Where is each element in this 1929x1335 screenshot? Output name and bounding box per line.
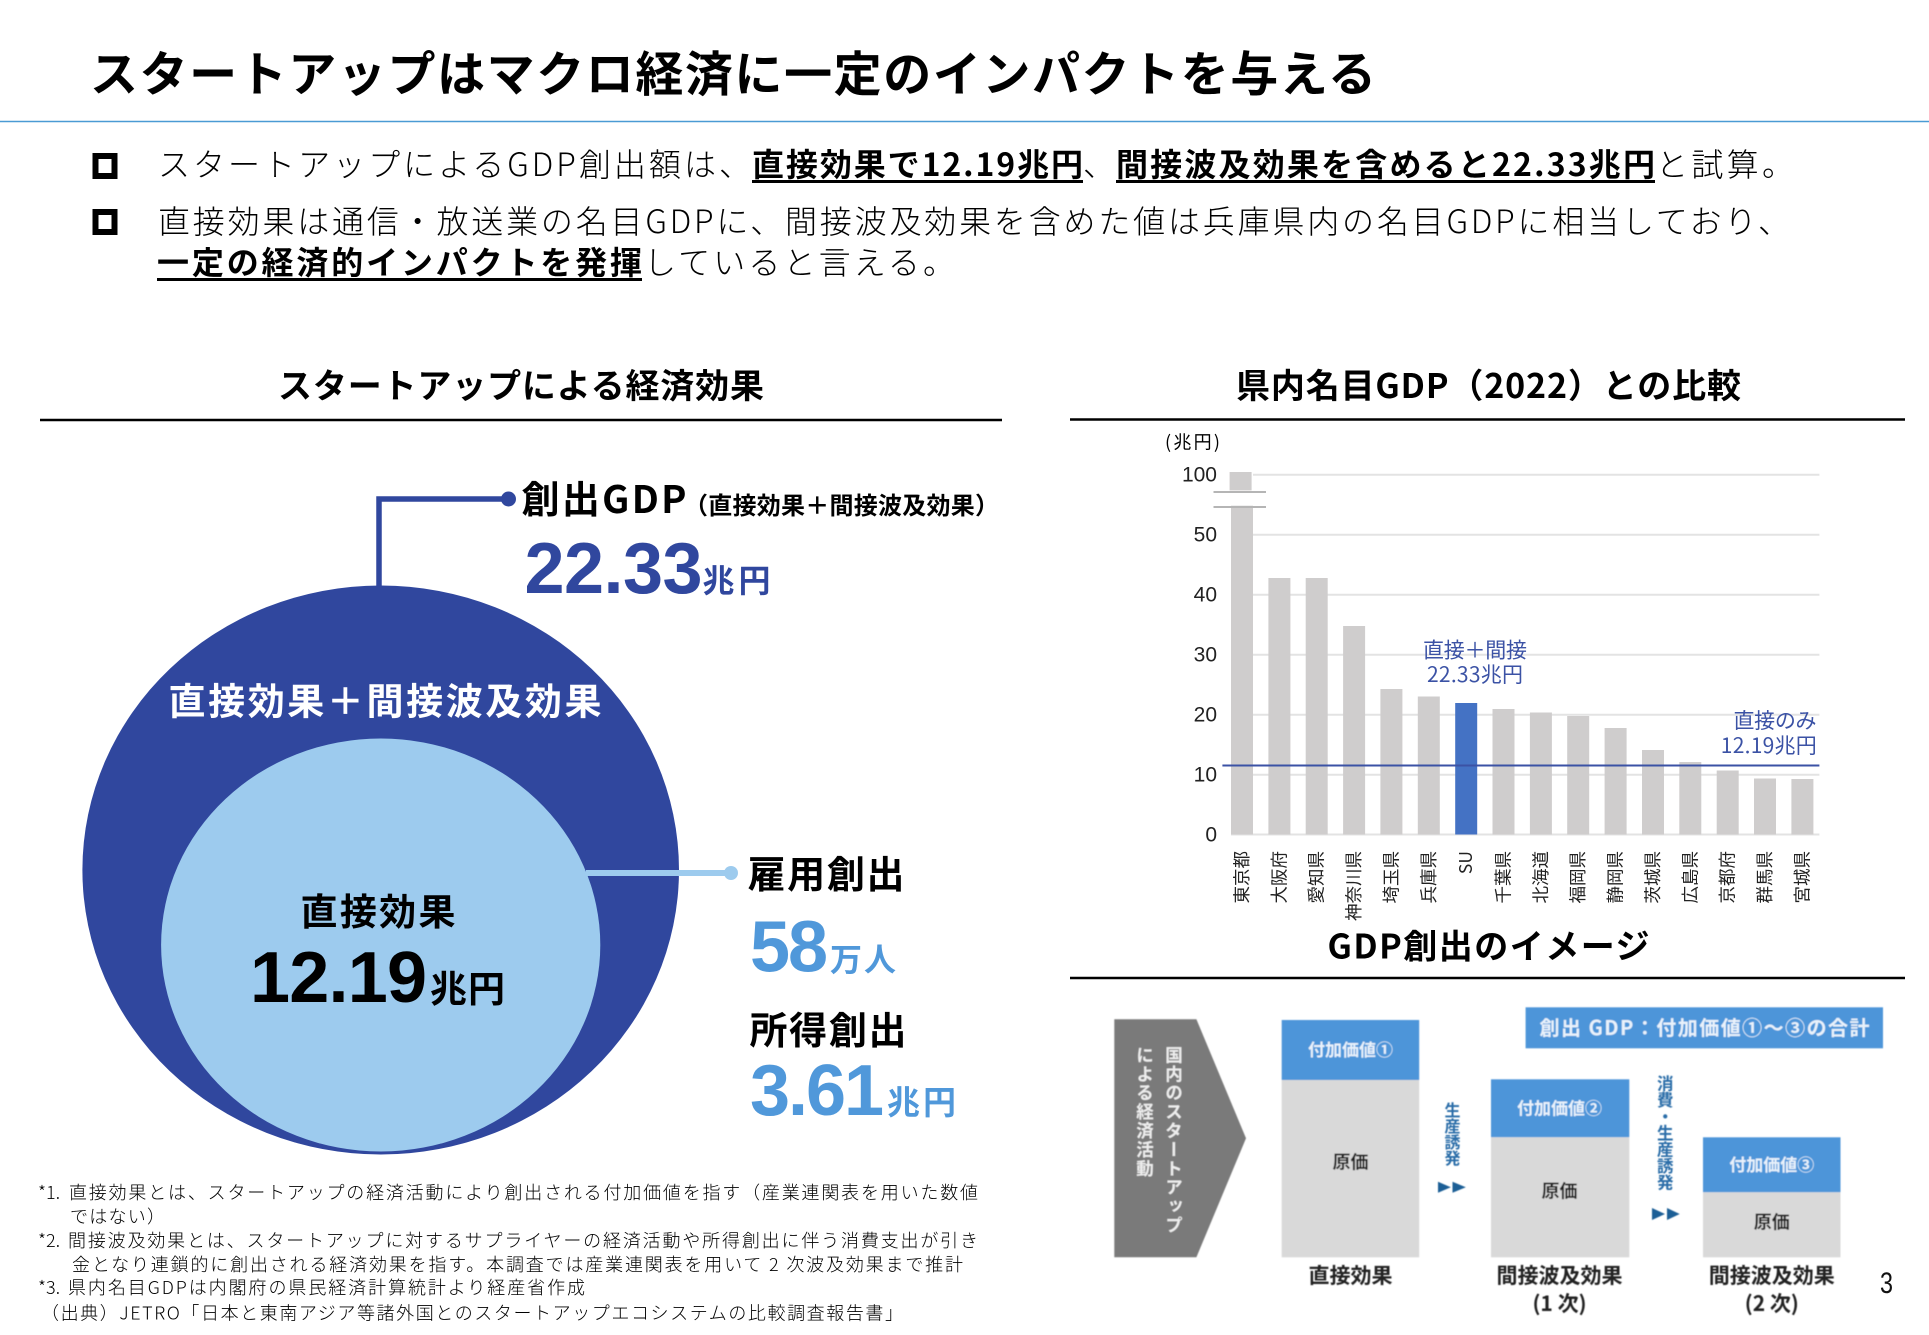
callout: income <box>750 1000 956 1131</box>
x axis labels: 福岡県 <box>1565 851 1590 904</box>
callout: created GDP <box>522 469 999 609</box>
footnotes: 間接波及効果とは、スタートアップに対するサプライヤーの経済活動や所得創出に伴う消費支出が引き <box>68 1227 978 1253</box>
callout: created GDP: 兆円 <box>702 556 770 602</box>
x axis labels: 宮城県 <box>1789 851 1814 904</box>
stack: indirect effect 2: 原価 <box>1754 1208 1790 1234</box>
x axis labels: 北海道 <box>1528 851 1553 904</box>
stack: direct effect: 付加価値① <box>1308 1036 1393 1061</box>
arrow label: consumption and production induction <box>1652 1075 1680 1220</box>
callout: created GDP: 22.33 <box>524 529 702 609</box>
y axis labels: 10 <box>1194 764 1217 786</box>
y axis labels <box>1182 464 1217 846</box>
inner circle label: 直接効果 <box>300 882 456 936</box>
bullet line 1: と試算。 <box>1656 140 1794 186</box>
y axis labels: 20 <box>1194 704 1217 726</box>
callout: jobs <box>748 844 904 988</box>
arrow: startup activity: による経済活動 <box>1132 1046 1158 1178</box>
footnotes <box>38 1179 978 1326</box>
arrow label: production induction: 生産誘発 <box>1440 1102 1464 1166</box>
footnotes: *2. <box>38 1227 60 1253</box>
callout: income: 兆円 <box>887 1076 956 1124</box>
y axis labels: 0 <box>1205 824 1217 846</box>
page number: 3 <box>1880 1267 1893 1300</box>
label: direct + indirect: 22.33兆円 <box>1427 659 1523 689</box>
connector: created GDP <box>379 499 507 590</box>
stack: indirect effect 1: 付加価値② <box>1517 1094 1602 1120</box>
inner circle label: 12.19 <box>250 938 427 1018</box>
footnotes: *3. <box>38 1274 60 1300</box>
footnotes: 県内名目GDPは内閣府の県民経済計算統計より経産省作成 <box>68 1274 585 1300</box>
outer circle label: 直接効果＋間接波及効果 <box>168 672 602 726</box>
x axis labels: 群馬県 <box>1752 851 1777 904</box>
y axis unit: (兆円) <box>1165 428 1220 454</box>
bullet line 3: 一定の経済的インパクトを発揮 <box>157 238 642 284</box>
stack: indirect effect 2 <box>1703 1137 1840 1318</box>
axis break <box>1214 492 1266 507</box>
nested circle diagram <box>82 492 738 1154</box>
y axis labels: 30 <box>1194 644 1217 666</box>
callout: created GDP: （直接効果＋間接波及効果） <box>684 486 999 521</box>
bullet icon 2 <box>96 212 114 232</box>
bullet line 1 <box>158 140 1794 186</box>
title: スタートアップはマクロ経済に一定のインパクトを与える <box>90 35 1376 105</box>
GDP creation diagram <box>1114 1007 1883 1318</box>
stack: indirect effect 1: 原価 <box>1542 1178 1578 1204</box>
y axis labels: 50 <box>1194 524 1217 546</box>
footnotes: （出典）JETRO「日本と東南アジア等諸外国とのスタートアップエコシステムの比較調査報告書」 <box>41 1300 903 1326</box>
x axis labels <box>1229 851 1814 921</box>
bullet icon 1 <box>96 156 114 176</box>
x axis labels: 埼玉県 <box>1378 851 1403 904</box>
heading: GDP creation image: GDP創出のイメージ <box>1328 920 1650 968</box>
connector: jobs <box>586 870 730 876</box>
stack: direct effect <box>1282 1020 1419 1290</box>
bars <box>1230 472 1813 834</box>
inner circle: direct <box>161 738 600 1152</box>
box: total created GDP <box>1526 1007 1883 1048</box>
x axis labels: 大阪府 <box>1266 851 1291 904</box>
label: direct only: 直接のみ <box>1734 705 1816 735</box>
x axis labels: 愛知県 <box>1304 851 1329 904</box>
arrow label: consumption and production induction: 消費・生産誘発 <box>1653 1075 1677 1191</box>
x axis labels: 京都府 <box>1715 851 1740 904</box>
stack: indirect effect 1: 間接波及効果 <box>1496 1260 1622 1290</box>
stack: indirect effect 1: (1 次) <box>1532 1288 1587 1318</box>
arrow: startup activity: 国内のスタートアップ <box>1162 1046 1186 1235</box>
callout: income: 3.61 <box>750 1051 884 1131</box>
inner circle label: 兆円 <box>430 959 505 1013</box>
outer circle: direct + indirect <box>82 586 679 1154</box>
label: direct only <box>1721 705 1817 760</box>
stack: indirect effect 2: (2 次) <box>1745 1288 1799 1318</box>
bullet line 2: 直接効果は通信・放送業の名目GDPに、間接波及効果を含めた値は兵庫県内の名目GDPに相当しており、 <box>158 197 1790 243</box>
footnotes: 直接効果とは、スタートアップの経済活動により創出される付加価値を指す（産業連関表を用いた数値 <box>69 1179 978 1205</box>
x axis labels: 広島県 <box>1677 851 1702 904</box>
bullet line 1: 、 <box>1083 140 1115 186</box>
direct-only line <box>1222 764 1819 766</box>
stack: direct effect: 原価 <box>1332 1148 1368 1174</box>
callout: jobs: 58 <box>750 908 828 988</box>
y axis labels: 100 <box>1182 464 1217 486</box>
footnotes: *1. <box>38 1179 60 1205</box>
x axis labels: 茨城県 <box>1640 851 1665 904</box>
inner circle label <box>250 882 505 1018</box>
stack: indirect effect 2: 間接波及効果 <box>1709 1260 1835 1290</box>
callout: income: 所得創出 <box>750 1000 906 1055</box>
label: direct + indirect: 直接＋間接 <box>1423 634 1527 664</box>
box: total created GDP: 創出 GDP：付加価値①～③の合計 <box>1540 1012 1870 1041</box>
heading: prefectural GDP comparison: 県内名目GDP（2022）との比較 <box>1236 359 1741 408</box>
bar chart: prefectural GDP <box>1165 428 1819 921</box>
y axis labels: 40 <box>1194 584 1217 606</box>
x axis labels: 東京都 <box>1229 851 1254 904</box>
stack: direct effect: 直接効果 <box>1308 1260 1392 1290</box>
bullet line 1: 直接効果で12.19兆円 <box>752 140 1083 186</box>
bullet line 3: していると言える。 <box>644 238 955 284</box>
bullet line 1: 間接波及効果を含めると22.33兆円 <box>1116 140 1655 186</box>
x axis labels: SU <box>1453 851 1478 874</box>
x axis labels: 静岡県 <box>1603 851 1628 904</box>
footnotes: 金となり連鎖的に創出される経済効果を指す。本調査では産業連関表を用いて 2 次波及効果まで推計 <box>72 1251 963 1277</box>
arrow: startup activity <box>1114 1019 1246 1257</box>
x axis labels: 神奈川県 <box>1341 851 1366 921</box>
stack: indirect effect 2: 付加価値③ <box>1729 1151 1814 1176</box>
x axis labels: 千葉県 <box>1490 851 1516 904</box>
callout: created GDP: 創出GDP <box>522 469 686 524</box>
label: direct + indirect <box>1423 634 1527 689</box>
callout: jobs: 万人 <box>830 935 896 981</box>
bullet line 1: スタートアップによるGDP創出額は、 <box>158 140 751 186</box>
x axis labels: 兵庫県 <box>1416 851 1441 904</box>
footnotes: ではない） <box>70 1203 165 1229</box>
arrow label: production induction <box>1438 1102 1466 1193</box>
bullet text block <box>96 140 1794 284</box>
stack: indirect effect 1 <box>1491 1079 1629 1318</box>
bullet line 3 <box>157 238 955 284</box>
label: direct only: 12.19兆円 <box>1721 730 1817 760</box>
callout: jobs: 雇用創出 <box>748 844 904 899</box>
heading: economic effect: スタートアップによる経済効果 <box>278 359 764 408</box>
